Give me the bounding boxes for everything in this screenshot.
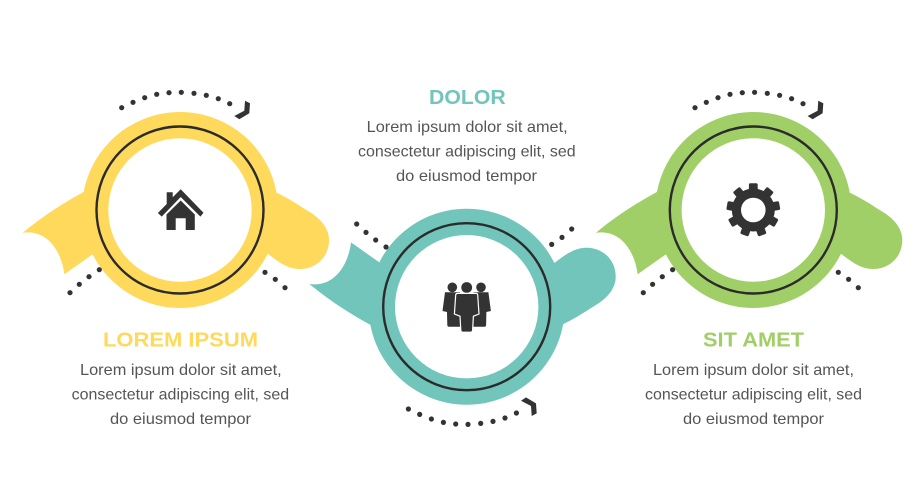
text block: dolor description: consectetur adipiscing elit, sed [358, 144, 576, 160]
heading: dolor: DOLOR [429, 87, 506, 109]
connector dots [641, 267, 861, 295]
text block: sit amet description: consectetur adipiscing elit, sed [645, 386, 862, 404]
text block: dolor description: do eiusmod tempor [396, 168, 537, 185]
dotted arc with arrow head [692, 90, 823, 119]
heading: lorem ipsum: LOREM IPSUM [103, 330, 258, 352]
text block: lorem ipsum description: consectetur adipiscing elit, sed [72, 386, 289, 404]
heading: sit amet: SIT AMET [703, 330, 804, 352]
text block: lorem ipsum description [72, 362, 289, 428]
text block: lorem ipsum description: Lorem ipsum dolor sit amet, [80, 362, 282, 379]
ring: dark thin ring [670, 126, 837, 294]
connector dots [67, 267, 288, 295]
text block: sit amet description: do eiusmod tempor [683, 411, 824, 428]
panel: lorem ipsum step [23, 90, 329, 428]
panel: sit amet step [596, 90, 902, 428]
icon: gear [726, 183, 780, 237]
connector dots [354, 221, 574, 250]
badge: yellow circle with wings [23, 112, 329, 308]
dotted arc with arrow head [406, 397, 537, 427]
text block: dolor description [358, 119, 576, 185]
badge: teal circle with wings [309, 209, 616, 405]
icon: people [442, 282, 491, 332]
panel: dolor step [309, 87, 616, 427]
ring: dark thin ring [383, 223, 550, 390]
badge: green circle with wings [596, 112, 902, 308]
text block: sit amet description [645, 362, 862, 428]
ring: dark thin ring [96, 126, 264, 294]
dotted arc with arrow head [119, 90, 250, 119]
icon: house [158, 189, 204, 230]
text block: sit amet description: Lorem ipsum dolor sit amet, [653, 362, 854, 379]
text block: lorem ipsum description: do eiusmod tempor [110, 411, 251, 428]
text block: dolor description: Lorem ipsum dolor sit amet, [367, 119, 568, 136]
